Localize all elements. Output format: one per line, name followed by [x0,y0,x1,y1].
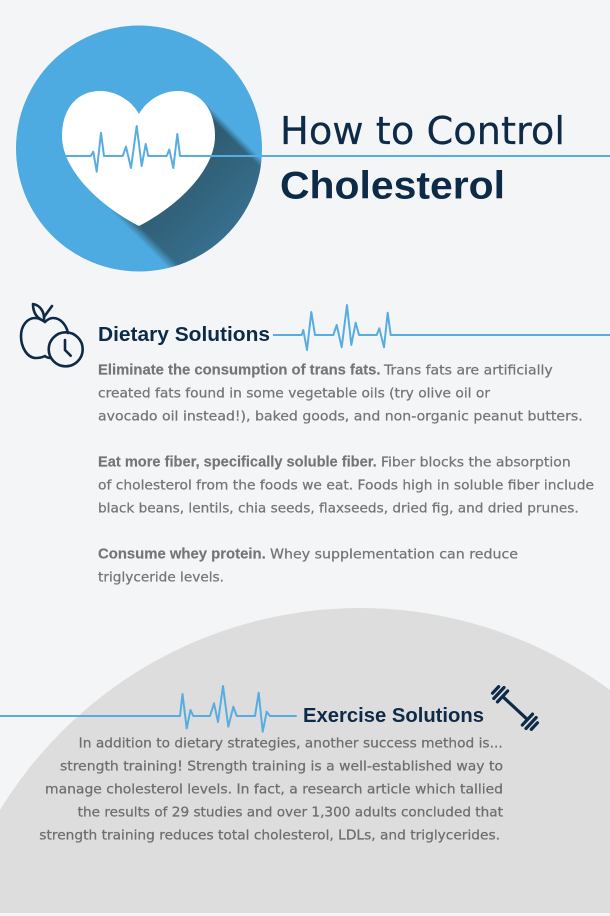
heading: exercise solutions: Exercise Solutions [303,705,484,727]
heading: dietary solutions: Dietary Solutions [98,324,270,346]
whey paragraph: Whey supplementation can reduce [270,546,518,562]
fiber paragraph: of cholesterol from the foods we eat. Foods high in soluble fiber include [98,477,594,493]
whey paragraph: Consume whey protein. [98,546,266,562]
trans fats paragraph: Trans fats are artificially [383,362,553,378]
trans fats paragraph: created fats found in some vegetable oils (try olive oil or [98,385,490,401]
ecg line: exercise [0,686,297,732]
icon: dumbbell [491,684,539,732]
ecg line: dietary [273,305,610,350]
trans fats paragraph: avocado oil instead!), baked goods, and non-organic peanut butters. [98,408,583,424]
fiber paragraph: Eat more fiber, specifically soluble fiber. [98,454,377,470]
title [280,109,565,208]
trans fats paragraph: Eliminate the consumption of trans fats. [98,362,380,378]
text block: exercise solutions: strength training reduces total cholesterol, LDLs, and triglycerides. [39,827,500,843]
whey paragraph [98,546,518,586]
text block: exercise solutions: the results of 29 studies and over 1,300 adults concluded that [78,804,503,820]
fiber paragraph [98,454,594,516]
fiber paragraph: black beans, lentils, chia seeds, flaxseeds, dried fig, and dried prunes. [98,500,579,516]
whey paragraph: triglyceride levels. [98,570,224,586]
title: Cholesterol [280,164,505,208]
text block: exercise solutions: manage cholesterol levels. In fact, a research article which tallied [45,781,503,797]
text block: exercise solutions [39,735,503,843]
icon: apple and clock [21,304,83,366]
panel: exercise background [0,608,610,913]
text block: exercise solutions: strength training! Strength training is a well-established way to [60,758,503,774]
icon: heart in circle with long shadow [16,26,610,272]
fiber paragraph: Fiber blocks the absorption [381,454,571,470]
text block: dietary solutions [98,362,594,586]
text block: exercise solutions: In addition to dietary strategies, another success method is... [79,735,503,751]
trans fats paragraph [98,362,583,424]
title: How to Control [280,109,565,154]
